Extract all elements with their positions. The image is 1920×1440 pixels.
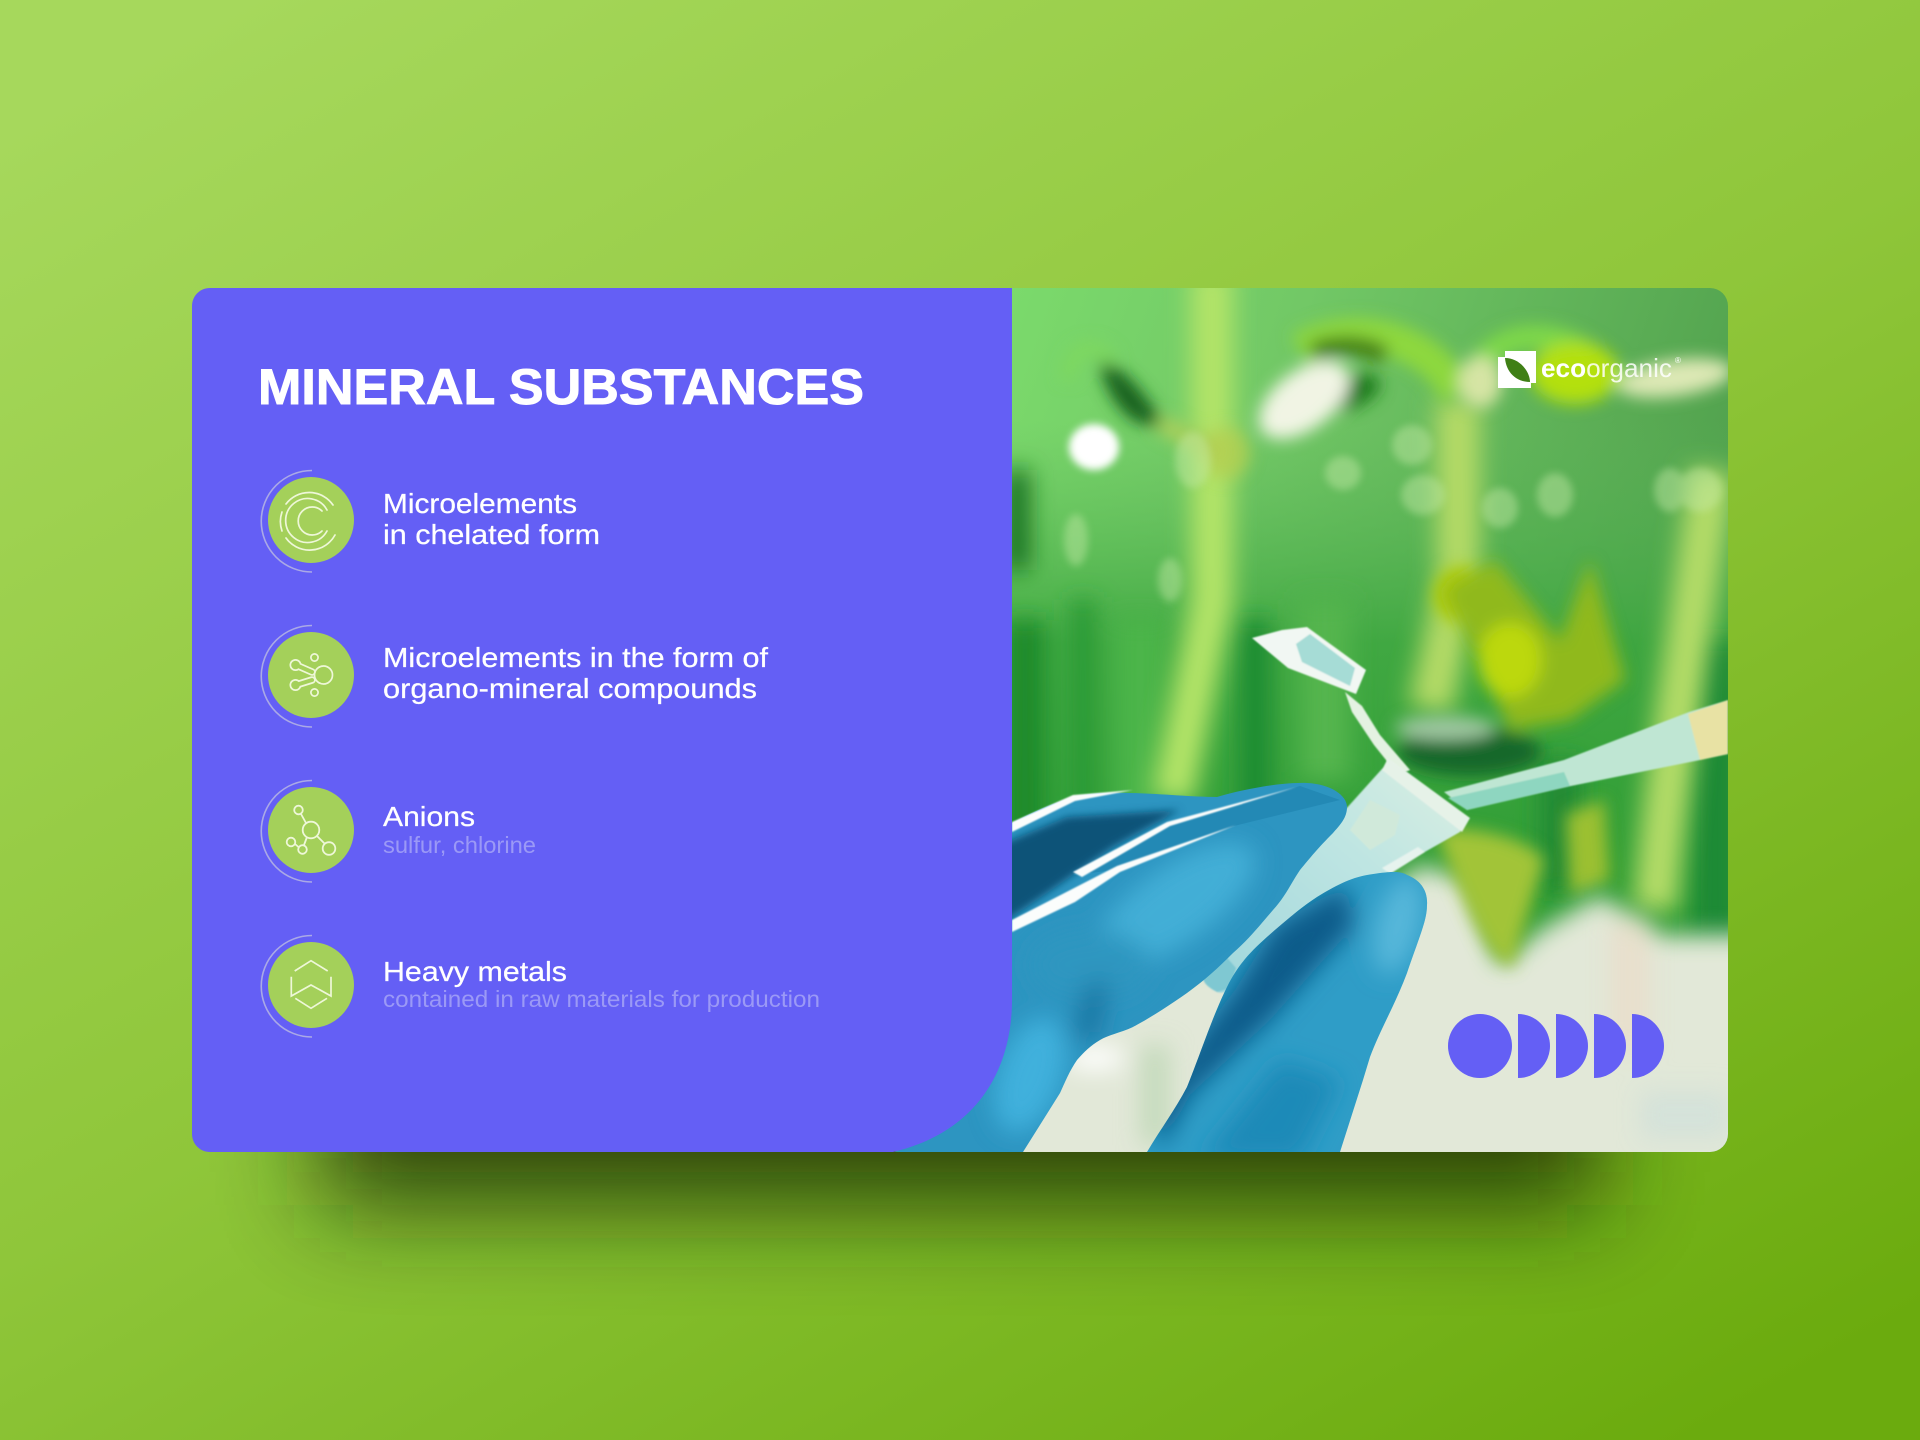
list item: organo-mineral compounds bbox=[261, 626, 768, 727]
list item: heavy metals bbox=[261, 935, 820, 1037]
backdrop lower green fade bbox=[1012, 480, 1728, 956]
glove index finger bbox=[880, 780, 1360, 1160]
text: anions: Anions bbox=[383, 801, 475, 832]
pipette tip bbox=[1444, 700, 1728, 810]
photo: lab glove holding test tube with seedlings bbox=[894, 288, 1728, 1152]
glove thumb bbox=[1147, 872, 1428, 1152]
bokeh highlights bbox=[1064, 425, 1722, 602]
text: organo-mineral compounds: Microelements in the form of bbox=[383, 642, 768, 673]
seedling leaves bbox=[1068, 335, 1735, 895]
text: organo-mineral compounds bbox=[383, 642, 768, 704]
thumb base colour bbox=[1147, 872, 1428, 1152]
icon: molecule network bbox=[261, 780, 354, 882]
logo: ecoorganic bbox=[1498, 351, 1681, 388]
registered mark: ® bbox=[1675, 356, 1681, 365]
card drop shadow bbox=[320, 1000, 1600, 1205]
tube lid bbox=[1252, 627, 1410, 775]
heading: MINERAL SUBSTANCES bbox=[258, 359, 864, 415]
bright sun spot bbox=[1069, 424, 1119, 470]
test tube bbox=[1203, 758, 1470, 993]
text: organo-mineral compounds: organo-mineral compounds bbox=[383, 673, 757, 704]
dumbbell outlines bbox=[290, 659, 312, 691]
list item: chelated microelements bbox=[261, 470, 600, 572]
dumbbell inner cutouts bbox=[291, 661, 312, 689]
panel: left purple content panel bbox=[192, 288, 1012, 1152]
list item: anions bbox=[261, 780, 536, 882]
brand mark: circle and half discs bbox=[1448, 1014, 1664, 1078]
icon: hexagon chevrons bbox=[261, 935, 354, 1037]
text: sulfur, chlorine: sulfur, chlorine bbox=[383, 832, 536, 858]
text: raw materials note: contained in raw materials for production bbox=[383, 986, 820, 1012]
seedling stems bbox=[1172, 270, 1712, 910]
text: heavy metals: Heavy metals bbox=[383, 956, 567, 987]
photo backdrop bbox=[880, 288, 1728, 1152]
glove white fold highlights bbox=[1012, 787, 1297, 932]
text: microelements in chelated form: Microelements bbox=[383, 488, 577, 519]
blurred vertical leaf streaks bbox=[1005, 470, 1740, 940]
icon: concentric chelate rings bbox=[261, 470, 354, 572]
icon: leaf in white square bbox=[1498, 351, 1536, 388]
text: microelements in chelated form bbox=[383, 488, 600, 550]
lighter glove patches bbox=[988, 838, 1258, 1136]
pale tints bbox=[1065, 920, 1730, 1145]
thumb shading bbox=[1150, 871, 1432, 1160]
pale lower backdrop bbox=[1023, 850, 1728, 1152]
stem through pale area bbox=[1495, 960, 1515, 1152]
text: microelements in chelated form: in chelated form bbox=[383, 519, 600, 550]
wordmark: ecoorganic bbox=[1541, 353, 1672, 383]
dark crease bbox=[1000, 810, 1180, 925]
lower leaf bbox=[1436, 829, 1544, 968]
upper fold band bbox=[1073, 786, 1340, 875]
icon: molecules merging bbox=[261, 626, 354, 727]
finger base colour bbox=[880, 780, 1360, 1160]
